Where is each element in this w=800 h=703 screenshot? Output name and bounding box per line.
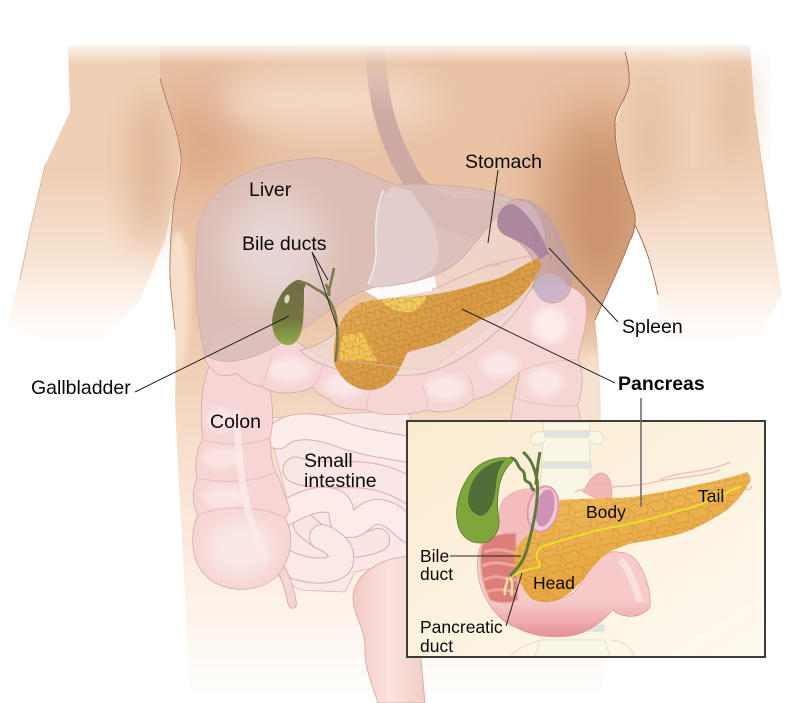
- body creases: [160, 52, 658, 330]
- colon: [193, 282, 586, 608]
- labels: Head: [533, 573, 575, 593]
- labels: [31, 151, 724, 656]
- ascending colon: [193, 365, 291, 589]
- duodenum cut-away: [480, 533, 518, 603]
- labels: Liver: [249, 179, 292, 201]
- labels: Pancreas: [618, 373, 705, 395]
- stomach: [300, 187, 545, 375]
- labels: Colon: [210, 411, 261, 433]
- labels: Small: [304, 450, 353, 472]
- labels: Bile: [420, 546, 449, 566]
- labels: intestine: [304, 470, 377, 492]
- labels: Spleen: [622, 316, 683, 338]
- top skin fade: [40, 0, 770, 64]
- labels: Tail: [698, 486, 724, 506]
- inset pancreas: [514, 472, 751, 602]
- inset gallbladder: [457, 458, 513, 543]
- duodenum: [478, 488, 650, 637]
- pale blood vessels: [432, 256, 530, 290]
- leader: gallbladder: [135, 316, 289, 392]
- labels: duct: [420, 564, 453, 584]
- pancreas: [334, 258, 541, 390]
- labels: Pancreatic: [420, 617, 503, 637]
- liver: [196, 158, 513, 361]
- inset bile duct: [510, 452, 540, 576]
- pancreas highlight patches: [380, 296, 427, 312]
- spleen: [497, 199, 572, 303]
- vessels: [583, 473, 612, 500]
- gallbladder: [272, 268, 337, 362]
- leader: stomach: [488, 170, 498, 243]
- spine: [510, 422, 634, 657]
- rectum: [353, 556, 425, 703]
- labels: Bile ducts: [242, 233, 327, 255]
- inset duodenum opening: [526, 485, 560, 533]
- inset pancreatic duct: [510, 486, 742, 578]
- leader: pancreatic duct: [506, 573, 522, 626]
- leader: bile duct: [450, 555, 521, 557]
- labels: Body: [586, 502, 626, 522]
- esophagus: [365, 48, 513, 240]
- leader: spleen: [549, 248, 618, 322]
- torso skin: [160, 45, 635, 666]
- small intestine: [266, 410, 412, 592]
- leader: bile ducts: [312, 252, 337, 327]
- labels: Stomach: [465, 151, 542, 173]
- inset panel: [407, 398, 765, 657]
- left arm: [8, 45, 181, 350]
- labels: duct: [420, 636, 453, 656]
- leader: pancreas to inset: [640, 398, 642, 507]
- transverse and descending colon: [204, 282, 586, 432]
- small papilla: [505, 578, 512, 596]
- leader: pancreas: [462, 309, 615, 383]
- right arm: [615, 45, 782, 345]
- white gap under liver: [360, 272, 437, 300]
- appendix: [274, 560, 296, 608]
- labels: Gallbladder: [31, 377, 131, 399]
